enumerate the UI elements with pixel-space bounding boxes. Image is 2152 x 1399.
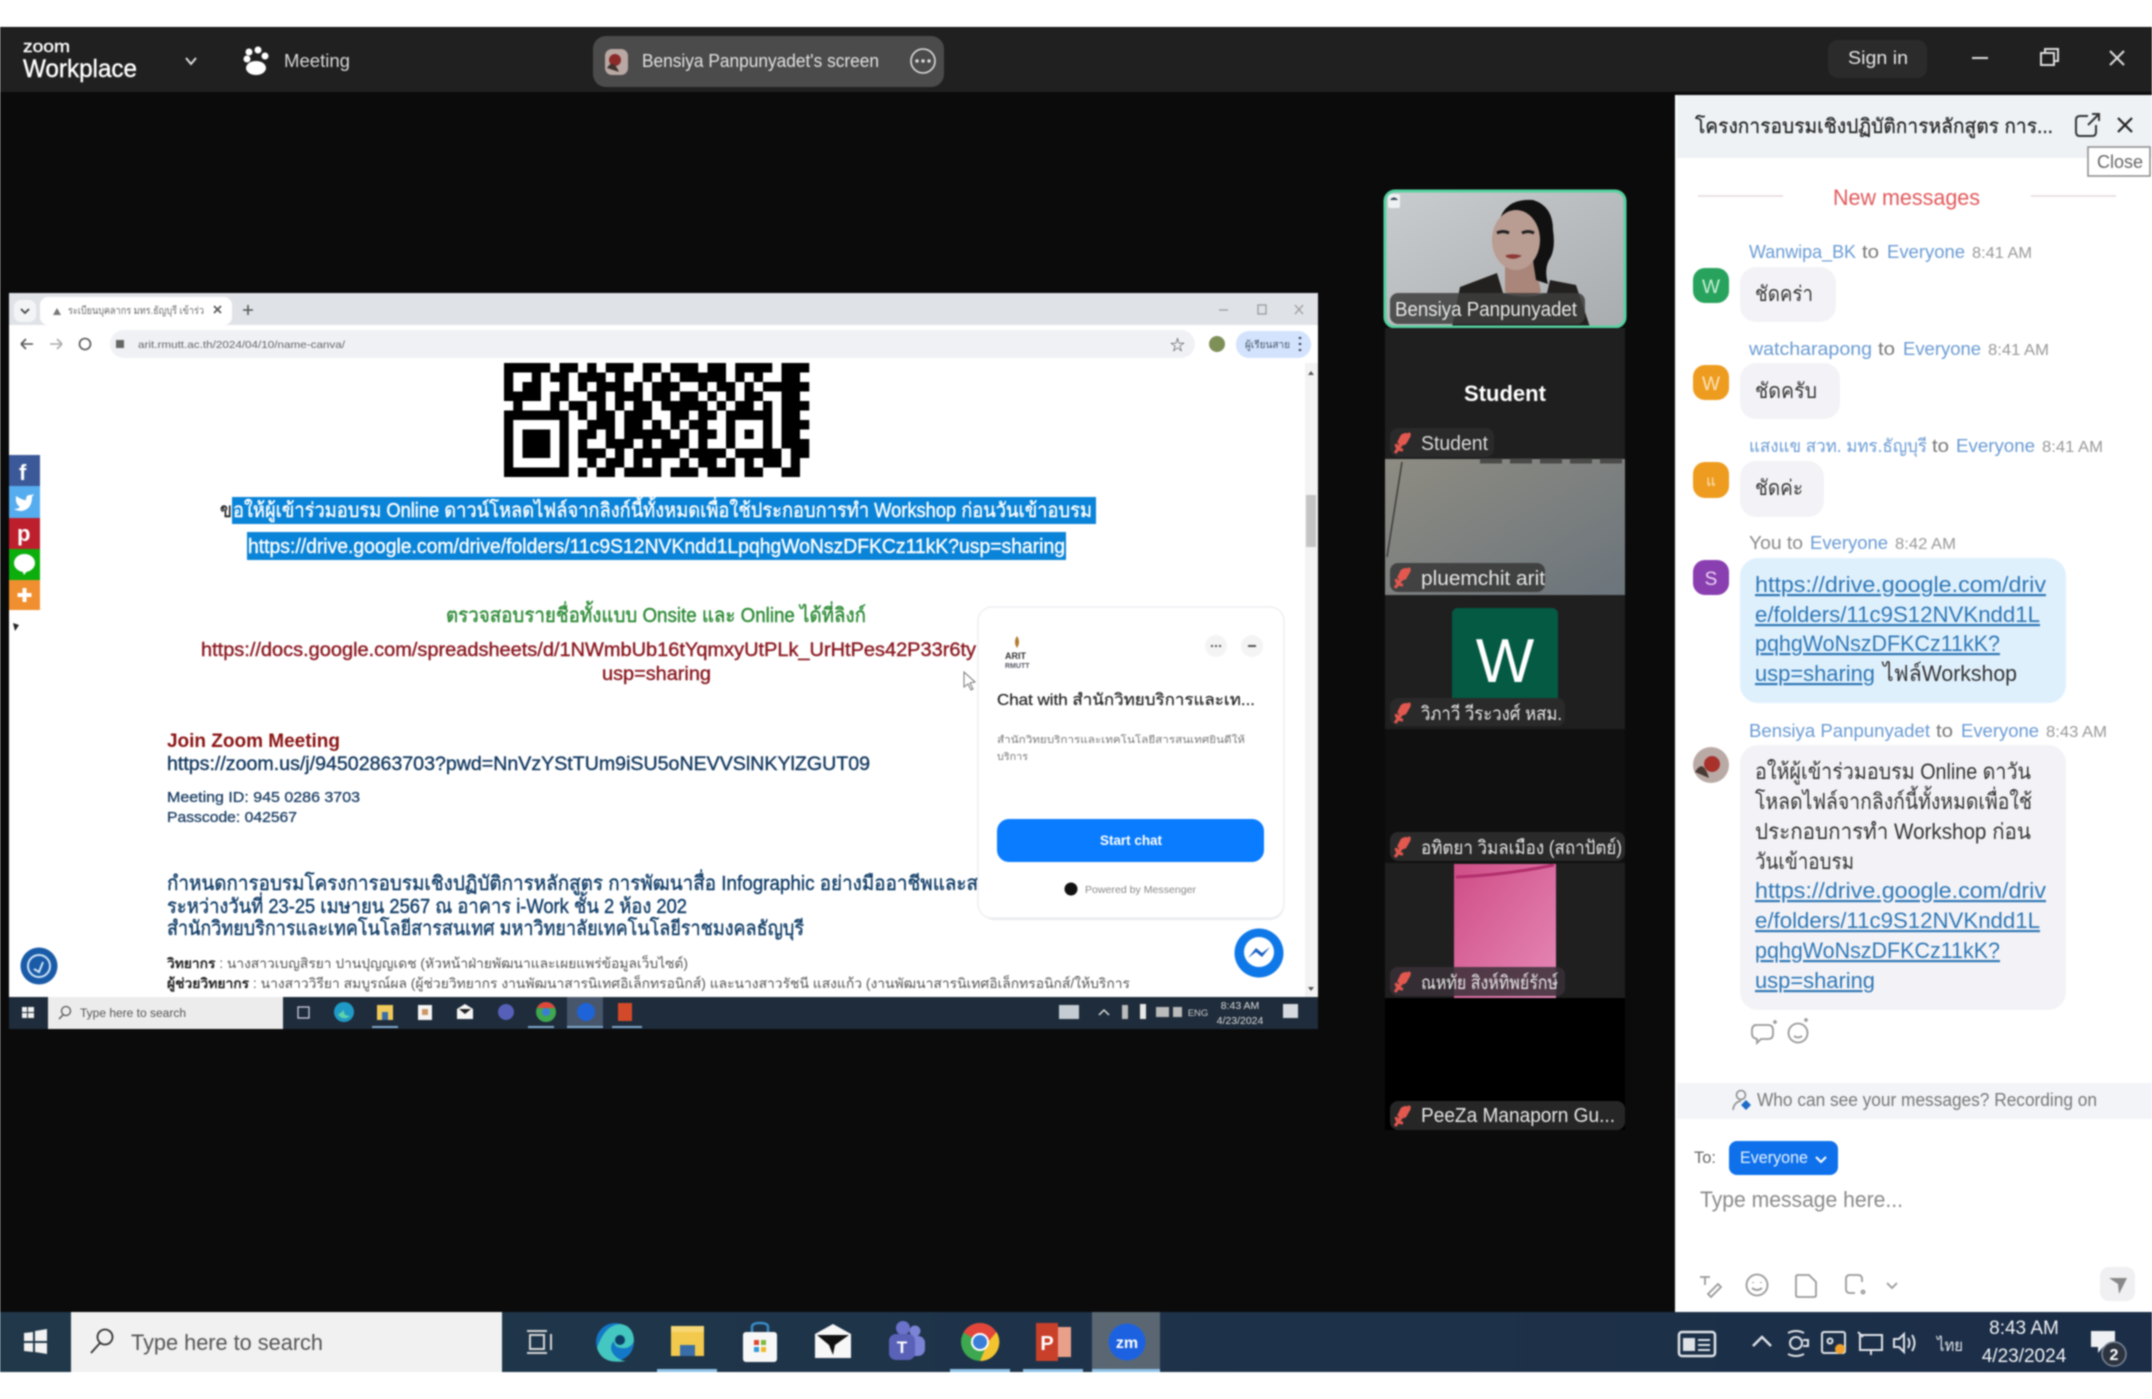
message: Bensiya: อให้ผู้เข้าร่วมอบรม Online ดาวัน: [1755, 759, 2031, 785]
new messages divider: New messages: [1833, 185, 1980, 210]
message: Bensiya: วันเข้าอบรม: [1755, 849, 1854, 874]
icon: teams: [889, 1321, 925, 1360]
tile: pink video: [1385, 863, 1625, 998]
training schedule text: สำนักวิทยบริการและเทคโนโลยีสารสนเทศ มหาวิทยาลัยเทคโนโลยีราชมงคลธัญบุรี: [167, 917, 804, 941]
close tooltip: [2088, 147, 2150, 176]
browser tab strip: ระเบียนบุคลากร มทร.ธัญบุรี เข้าร่ว: [68, 304, 204, 317]
inner shared taskbar: [9, 997, 1318, 1029]
message: Bensiya: Bensiya Panpunyadet: [1749, 721, 1930, 741]
notification icon: [2091, 1331, 2126, 1366]
message: Wanwipa_BK: to: [1862, 242, 1879, 262]
recipient selector: [1694, 1141, 1838, 1175]
icon: accessibility: [20, 948, 58, 984]
chat composer icons: [1700, 1274, 1897, 1297]
tile: PeeZa Manaporn: PeeZa Manaporn Gu...: [1421, 1105, 1615, 1127]
icon: zoom active: [1092, 1312, 1160, 1372]
tile: Adittaya: อทิตยา วิมลเมือง (สถาปัตย์): [1421, 837, 1622, 859]
icon: powerpoint: P: [1040, 1333, 1054, 1355]
tile: Bensiya Panpunyadet: Bensiya Panpunyadet: [1395, 299, 1577, 321]
icon: file explorer: [671, 1326, 704, 1356]
browser tab strip: [9, 293, 1318, 325]
message: you: Everyone: [1810, 533, 1888, 553]
messenger chat widget: Powered by Messenger: [1085, 884, 1197, 896]
message: Bensiya: pqhgWoNszDFKCz11kK?: [1755, 938, 2000, 963]
icon: meeting paw: [244, 46, 268, 75]
message: Bensiya: e/folders/11c9S12NVKndd1L: [1755, 908, 2040, 933]
message: Wanwipa_BK: Everyone: [1887, 242, 1965, 262]
social share bar: f: [19, 460, 27, 485]
tile: pluemchit arit: pluemchit arit: [1421, 568, 1545, 590]
icon: arit logo: ARIT: [1005, 651, 1026, 661]
icon: zoom active: zm: [1116, 1335, 1138, 1352]
highlighted instruction line: ข: [220, 500, 232, 522]
icon: store: [743, 1323, 777, 1362]
inner shared taskbar: ENG: [1188, 1008, 1208, 1019]
sign in button: [1828, 40, 1927, 78]
message: watcharapong: watcharapong: [1748, 339, 1872, 359]
messenger chat widget: [978, 607, 1284, 920]
window controls: [1972, 49, 2124, 65]
message: watcharapong: Everyone: [1903, 339, 1981, 359]
system clock: 8:43 AM: [1989, 1318, 2059, 1339]
message: Bensiya: ประกอบการทำ Workshop ก่อน: [1755, 819, 2031, 844]
training schedule text: ระหว่างวันที่ 23-25 เมษายน 2567 ณ อาคาร i-Work ชั้น 2 ห้อง 202: [167, 892, 687, 918]
message: Bensiya: โหลดไฟล์จากลิงก์นี้ทั้งหมดเพื่อใช้: [1755, 786, 2032, 814]
tile: Student: Student: [1421, 433, 1488, 455]
icon: start: [24, 1329, 47, 1354]
messenger bubble button: [1234, 928, 1284, 978]
recipient selector: Everyone: [1740, 1148, 1808, 1167]
green check text: ตรวจสอบรายชื่อทั้งแบบ Onsite และ Online ได้ที่ลิงก์: [446, 601, 866, 627]
message: you: You to: [1749, 533, 1803, 553]
tile: Adittaya: [1385, 729, 1625, 863]
spreadsheet link: usp=sharing: [602, 663, 711, 685]
messenger chat widget: บริการ: [997, 752, 1029, 763]
address bar: arit.rmutt.ac.th/2024/04/10/name-canva/: [138, 339, 345, 351]
highlighted instruction line: อให้ผู้เข้าร่วมอบรม Online ดาวน์โหลดไฟล์จากลิงก์นี้ทั้งหมดเพื่อใช้ประกอบการทำ Workshop ก่อนวันเข้าอบรม: [233, 496, 1092, 523]
messenger chat widget: สำนักวิทยบริการและเทคโนโลยีสารสนเทศยินดีให้: [997, 733, 1245, 746]
icon: mail: [815, 1324, 851, 1358]
message: watcharapong: W: [1702, 374, 1720, 395]
icon: task view: [527, 1331, 551, 1353]
message: you: pqhgWoNszDFKCz11kK?: [1755, 631, 2000, 656]
message: you: e/folders/11c9S12NVKndd1L: [1755, 602, 2040, 627]
scrollbar: [1305, 363, 1318, 997]
icon: chevron: [186, 58, 196, 64]
tile: Bensiya Panpunyadet: [1385, 191, 1625, 327]
tile: Student: [1385, 328, 1625, 459]
sign in button: Sign in: [1848, 48, 1908, 68]
screen share pill: Bensiya Panpunyadet's screen: [642, 51, 879, 71]
message: Bensiya: 8:43 AM: [2046, 724, 2107, 741]
message: you: usp=sharing: [1755, 661, 1875, 686]
icon: mouse cursor: [964, 672, 975, 690]
address bar: ☆: [1170, 337, 1185, 354]
training schedule text: กำหนดการอบรมโครงการอบรมเชิงปฏิบัติการหลักสูตร การพัฒนาสื่อ Infographic อย่างมืออาชีพและส: [167, 869, 978, 896]
chat panel: [1675, 95, 2152, 1312]
icon: arit logo: RMUTT: [1005, 663, 1030, 670]
search box: [71, 1312, 502, 1372]
message: sangkhae: Everyone: [1956, 436, 2035, 456]
message: Bensiya: [1693, 721, 2107, 1010]
tray status dot: [1835, 1344, 1845, 1354]
tile: pluemchit arit: [1385, 459, 1625, 595]
message: Bensiya: https://drive.google.com/driv: [1755, 878, 2046, 903]
address bar: [9, 325, 1318, 363]
language indicator: ไทย: [1935, 1335, 1963, 1355]
icon: teams: T: [897, 1338, 908, 1357]
icon: chrome: [961, 1323, 999, 1361]
message: watcharapong: ชัดครับ: [1755, 380, 1817, 403]
message: watcharapong: [1693, 339, 2049, 419]
inner shared taskbar: 4/23/2024: [1217, 1015, 1264, 1027]
shared browser window: [9, 293, 1318, 1029]
messenger chat widget: Chat with สำนักวิทยบริการและเท...: [997, 692, 1255, 709]
message: Wanwipa_BK: [1693, 242, 2032, 322]
message: watcharapong: 8:41 AM: [1988, 342, 2049, 359]
screen share pill: [593, 36, 944, 87]
message: watcharapong: to: [1878, 339, 1895, 359]
meeting id and passcode: [167, 789, 360, 826]
message: sangkhae: [1693, 436, 2103, 517]
privacy notice band: Who can see your messages? Recording on: [1757, 1090, 2097, 1110]
address bar: ผู้เรียนสาย: [1245, 339, 1290, 351]
icon: edge: [596, 1323, 634, 1362]
running app indicators: [657, 1369, 1160, 1372]
zoom workplace logo: [23, 37, 137, 83]
message: Wanwipa_BK: ชัดคร่า: [1755, 283, 1813, 306]
message: sangkhae: แสงแข สวท. มทร.ธัญบุรี: [1749, 436, 1927, 457]
message: you: ไฟล์Workshop: [1881, 661, 2017, 686]
zoom workplace logo: Workplace: [23, 55, 137, 83]
message: Wanwipa_BK: 8:41 AM: [1972, 245, 2032, 262]
icon: powerpoint: [1036, 1323, 1071, 1361]
speakers text: วิทยากร : นางสาวเบญสิรยา ปานปุญญเดช (หัวหน้าฝ่ายพัฒนาและเผยแพร่ข้อมูลเว็บไซต์): [167, 954, 688, 972]
social share bar: p: [17, 521, 30, 546]
message: you: 8:42 AM: [1895, 536, 1956, 553]
tile: PeeZa Manaporn: [1385, 998, 1625, 1130]
privacy notice band: [1677, 1083, 2152, 1119]
speakers text: [167, 954, 1130, 992]
message: Bensiya: usp=sharing: [1755, 968, 1875, 993]
message: Wanwipa_BK: Wanwipa_BK: [1749, 242, 1856, 263]
search box: Type here to search: [131, 1330, 323, 1355]
system clock: [1982, 1318, 2067, 1367]
social share bar: [9, 455, 40, 610]
tile: pink video: ณหทัย สิงห์ทิพย์รักษ์: [1421, 972, 1558, 994]
message: you: [1693, 533, 2066, 703]
meeting label: Meeting: [284, 51, 350, 71]
tile: Student: Student: [1464, 381, 1547, 406]
message: sangkhae: 8:41 AM: [2042, 439, 2103, 456]
message: Wanwipa_BK: W: [1702, 277, 1720, 298]
meeting id and passcode: Passcode: 042567: [167, 809, 297, 826]
zoom workplace logo: zoom: [23, 37, 70, 56]
icon: small mark: [13, 623, 19, 631]
notification icon: 2: [2110, 1347, 2119, 1364]
close tooltip: Close: [2097, 152, 2143, 172]
QR code: [504, 368, 809, 472]
training schedule text: [167, 869, 978, 941]
spreadsheet link: [201, 639, 976, 685]
spreadsheet link: https://docs.google.com/spreadsheets/d/1NWmbUb16tYqmxyUtPLk_UrHtPes42P33r6ty: [201, 639, 976, 661]
message: sangkhae: แ: [1706, 473, 1716, 490]
tile: W avatar: [1385, 595, 1625, 729]
meeting id and passcode: Meeting ID: 945 0286 3703: [167, 789, 360, 806]
tile: W avatar: W: [1476, 627, 1535, 696]
recipient selector: To:: [1694, 1148, 1716, 1167]
chat header: [1677, 95, 2152, 158]
message: sangkhae: ชัดค่ะ: [1755, 477, 1803, 500]
chat header: โครงการอบรมเชิงปฏิบัติการหลักสูตร การ...: [1695, 115, 2053, 139]
join zoom heading: Join Zoom Meeting: [167, 731, 340, 752]
top toolbar: [0, 28, 2152, 92]
windows taskbar: [0, 1312, 2152, 1372]
message: Bensiya: Everyone: [1961, 721, 2039, 741]
participants column: [1385, 191, 1625, 1130]
messenger chat widget: Start chat: [1100, 833, 1162, 848]
inner shared taskbar: 8:43 AM: [1221, 1000, 1259, 1012]
zoom link: https://zoom.us/j/94502863703?pwd=NnVzYStTUm9iSU5oNEVVSlNKYlZGUT09: [167, 753, 870, 775]
tray icons: [1679, 1331, 1914, 1356]
send button: [2100, 1267, 2135, 1301]
tile: W avatar: วิภาวี วีระวงศ์ หสม.: [1421, 703, 1562, 725]
message: Bensiya: to: [1936, 721, 1953, 741]
icon: arit logo: [1005, 636, 1030, 670]
highlighted drive link: https://drive.google.com/drive/folders/11c9S12NVKndd1LpqhgWoNszDFKCz11kK?usp=sharing: [248, 536, 1065, 558]
reaction icons: [1752, 1018, 1808, 1043]
speakers text: ผู้ช่วยวิทยากร : นางสาววิรียา สมบูรณ์ผล (ผู้ช่วยวิทยากร งานพัฒนาสารนิเทศอิเล็กทรอนิกส์) และนางสาวรัชนี แสงแก้ว (งานพัฒนาสารนิเทศอิเล็กทรอนิกส์/ให้บริการ: [167, 974, 1130, 992]
message input placeholder: Type message here...: [1700, 1187, 1903, 1212]
message: you: https://drive.google.com/driv: [1755, 572, 2046, 597]
inner shared taskbar: Type here to search: [80, 1008, 186, 1020]
message: you: S: [1705, 569, 1717, 590]
system clock: 4/23/2024: [1982, 1346, 2067, 1367]
message: sangkhae: to: [1932, 436, 1949, 456]
